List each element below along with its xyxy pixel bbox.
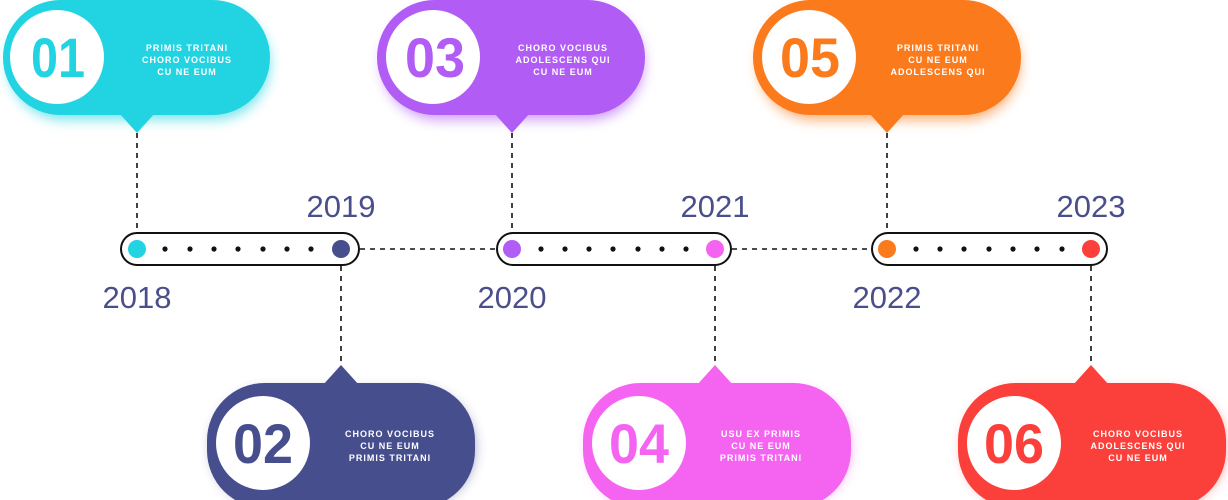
bubble 01: CHORO VOCIBUS bbox=[142, 55, 232, 65]
year labels: 2022 bbox=[853, 280, 921, 315]
bubble 03: 03 bbox=[405, 26, 465, 89]
bubble 03 bbox=[377, 0, 645, 133]
bubble 05: 05 bbox=[780, 26, 840, 89]
year labels: 2018 bbox=[103, 280, 171, 315]
year labels bbox=[103, 189, 1125, 315]
bubble 03: CHORO VOCIBUS bbox=[518, 43, 608, 53]
connector lines bbox=[137, 133, 1091, 365]
bubble 01: PRIMIS TRITANI bbox=[146, 43, 228, 53]
bubble 05: PRIMIS TRITANI bbox=[897, 43, 979, 53]
track 2020-2021 bbox=[497, 233, 731, 265]
bubble 03: ADOLESCENS QUI bbox=[515, 55, 611, 65]
track 2018-2019 bbox=[121, 233, 359, 265]
bubble 03: CU NE EUM bbox=[533, 67, 593, 77]
bubble 04 bbox=[583, 365, 851, 500]
bubble 02: CHORO VOCIBUS bbox=[345, 429, 435, 439]
year labels: 2020 bbox=[478, 280, 546, 315]
bubble 02: 02 bbox=[233, 412, 293, 475]
bubble 06: CHORO VOCIBUS bbox=[1093, 429, 1183, 439]
bubble 02: CU NE EUM bbox=[360, 441, 420, 451]
bubble 04: 04 bbox=[609, 412, 669, 475]
bubble 04: CU NE EUM bbox=[731, 441, 791, 451]
year labels: 2021 bbox=[681, 189, 749, 224]
bubble 06: ADOLESCENS QUI bbox=[1090, 441, 1186, 451]
bubble 01 bbox=[3, 0, 270, 133]
bubble 05 bbox=[753, 0, 1021, 133]
bubble 06: CU NE EUM bbox=[1108, 453, 1168, 463]
bubble 05: ADOLESCENS QUI bbox=[890, 67, 986, 77]
year labels: 2023 bbox=[1057, 189, 1125, 224]
track 2022-2023 bbox=[872, 233, 1107, 265]
bubble 02 bbox=[207, 365, 475, 500]
bubble 04: USU EX PRIMIS bbox=[721, 429, 801, 439]
bubble 06 bbox=[958, 365, 1226, 500]
bubble 02: PRIMIS TRITANI bbox=[349, 453, 431, 463]
bubble 04: PRIMIS TRITANI bbox=[720, 453, 802, 463]
bubble 05: CU NE EUM bbox=[908, 55, 968, 65]
year labels: 2019 bbox=[307, 189, 375, 224]
bubble 06: 06 bbox=[984, 412, 1044, 475]
bubble 01: CU NE EUM bbox=[157, 67, 217, 77]
bubble 01: 01 bbox=[31, 26, 85, 89]
